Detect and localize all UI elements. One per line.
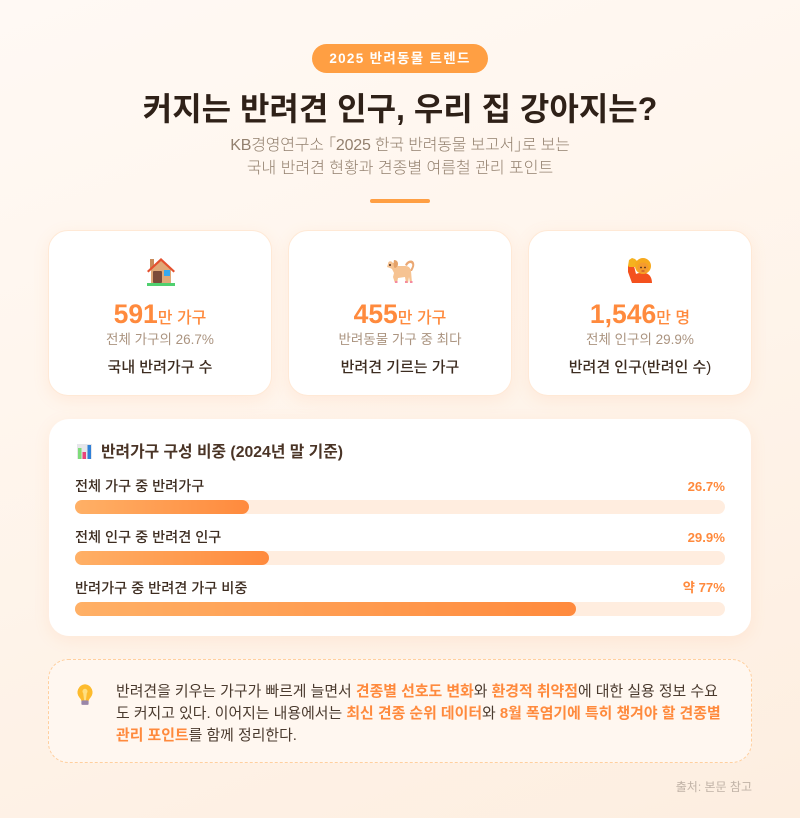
badge — [312, 44, 488, 73]
stat value: 591만 가구 — [114, 299, 206, 329]
stat note: 전체 인구의 29.9% — [586, 332, 694, 347]
title: 커지는 반려견 인구, 우리 집 강아지는? — [143, 91, 657, 127]
row value: 29.9% — [688, 530, 725, 545]
panel: dog households — [288, 230, 512, 396]
stat note: 반려동물 가구 중 최다 — [338, 332, 462, 347]
icon: bar chart — [77, 444, 92, 459]
source note: 출처: 본문 참고 — [676, 780, 752, 794]
icon: person raising hand — [628, 258, 652, 283]
stat note: 전체 가구의 26.7% — [106, 332, 214, 347]
callout text: 관리 포인트를 함께 정리한다. — [116, 728, 297, 744]
stat label: 반려견 기르는 가구 — [341, 359, 459, 376]
row: households — [75, 478, 725, 514]
subtitle — [230, 136, 570, 177]
stat label: 반려견 인구(반려인 수) — [569, 359, 711, 376]
row label: 반려가구 중 반려견 가구 비중 — [75, 581, 247, 597]
progress bar — [75, 500, 725, 514]
icon: dog — [387, 260, 414, 283]
stat label: 국내 반려가구 수 — [108, 359, 212, 376]
badge: 2025 반려동물 트렌드 — [329, 51, 471, 66]
row value: 약 77% — [683, 580, 725, 595]
subtitle: 국내 반려견 현황과 견종별 여름철 관리 포인트 — [247, 160, 553, 177]
stat value: 1,546만 명 — [590, 299, 690, 329]
icon: light bulb — [78, 684, 92, 705]
icon: house — [147, 258, 175, 286]
accent divider — [370, 199, 430, 203]
stat value: 455만 가구 — [354, 299, 446, 329]
chart heading: 반려가구 구성 비중 (2024년 말 기준) — [101, 444, 343, 461]
callout — [48, 659, 752, 763]
row label: 전체 가구 중 반려가구 — [75, 479, 204, 495]
panel: dog owners — [528, 230, 752, 396]
panel: composition chart — [49, 419, 751, 636]
callout text: 도 커지고 있다. 이어지는 내용에서는 최신 견종 순위 데이터와 8월 폭염기에 특히 챙겨야 할 견종별 — [116, 706, 721, 722]
row: dog share — [75, 580, 725, 616]
progress bar — [75, 602, 725, 616]
row label: 전체 인구 중 반려견 인구 — [75, 530, 221, 546]
row value: 26.7% — [688, 479, 725, 494]
row: population — [75, 530, 725, 565]
callout text: 반려견을 키우는 가구가 빠르게 늘면서 견종별 선호도 변화와 환경적 취약점에 대한 실용 정보 수요 — [116, 684, 718, 700]
progress bar — [75, 551, 725, 565]
subtitle: KB경영연구소 「2025 한국 반려동물 보고서」로 보는 — [230, 137, 570, 154]
panel: households — [48, 230, 272, 396]
callout text — [116, 683, 721, 744]
